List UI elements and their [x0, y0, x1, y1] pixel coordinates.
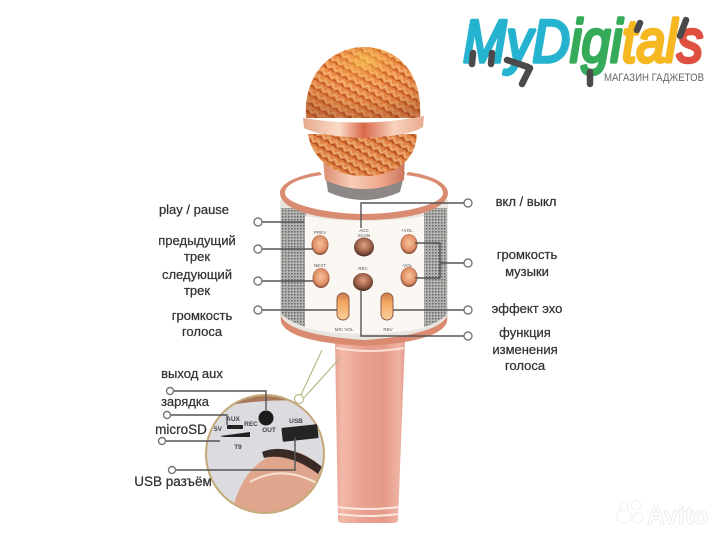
magnifier: charging panel: AUX	[226, 416, 241, 423]
control buttons: REC	[358, 266, 368, 271]
microphone head	[303, 47, 424, 200]
control buttons: REV	[383, 327, 393, 332]
logo: MyDigitals: MyDigitals	[463, 8, 703, 75]
callout labels: play / pause	[159, 202, 229, 217]
callout labels: громкость	[172, 308, 232, 323]
control buttons: SCAN	[358, 233, 370, 238]
callout labels: трек	[184, 283, 210, 298]
magnifier: charging panel: OUT	[262, 427, 276, 434]
callout labels: голоса	[505, 358, 546, 373]
watermark: Avito	[617, 500, 709, 530]
magnifier: charging panel	[205, 350, 340, 513]
control buttons	[312, 228, 418, 332]
microphone	[280, 47, 448, 523]
callout labels	[134, 194, 562, 489]
callout labels: функция	[499, 325, 551, 340]
watermark: Avito: Avito	[647, 502, 709, 530]
control buttons: +VOL	[401, 228, 413, 233]
callout labels: USB разъём	[134, 474, 212, 489]
control buttons: NEXT	[314, 263, 326, 268]
microphone body	[280, 172, 448, 346]
microphone handle	[335, 340, 405, 523]
control buttons: PREV	[314, 230, 326, 235]
callout labels: голоса	[182, 324, 223, 339]
callout labels: музыки	[505, 264, 549, 279]
magnifier: charging panel: T9	[234, 444, 242, 451]
magnifier: charging panel: REC	[244, 421, 258, 428]
logo: MyDigitals: МАГАЗИН ГАДЖЕТОВ	[604, 72, 704, 84]
magnifier: charging panel: 5V	[214, 426, 223, 433]
control buttons: -VOL	[402, 263, 413, 268]
callout labels: предыдущий	[158, 233, 236, 248]
callout labels: эффект эхо	[492, 301, 562, 316]
connector lines	[254, 199, 472, 340]
callout labels: трек	[184, 249, 210, 264]
callout labels: вкл / выкл	[496, 194, 556, 209]
magnifier: charging panel: USB	[289, 418, 303, 425]
bottom-left connector lines	[158, 388, 295, 474]
callout labels: microSD	[155, 422, 207, 437]
callout labels: изменения	[492, 342, 558, 357]
callout labels: выход aux	[161, 366, 223, 381]
control buttons: ACC	[359, 228, 369, 233]
control buttons: MIC VOL	[335, 327, 354, 332]
callout labels: громкость	[497, 247, 557, 262]
callout labels: зарядка	[161, 394, 210, 409]
callout labels: следующий	[162, 267, 232, 282]
